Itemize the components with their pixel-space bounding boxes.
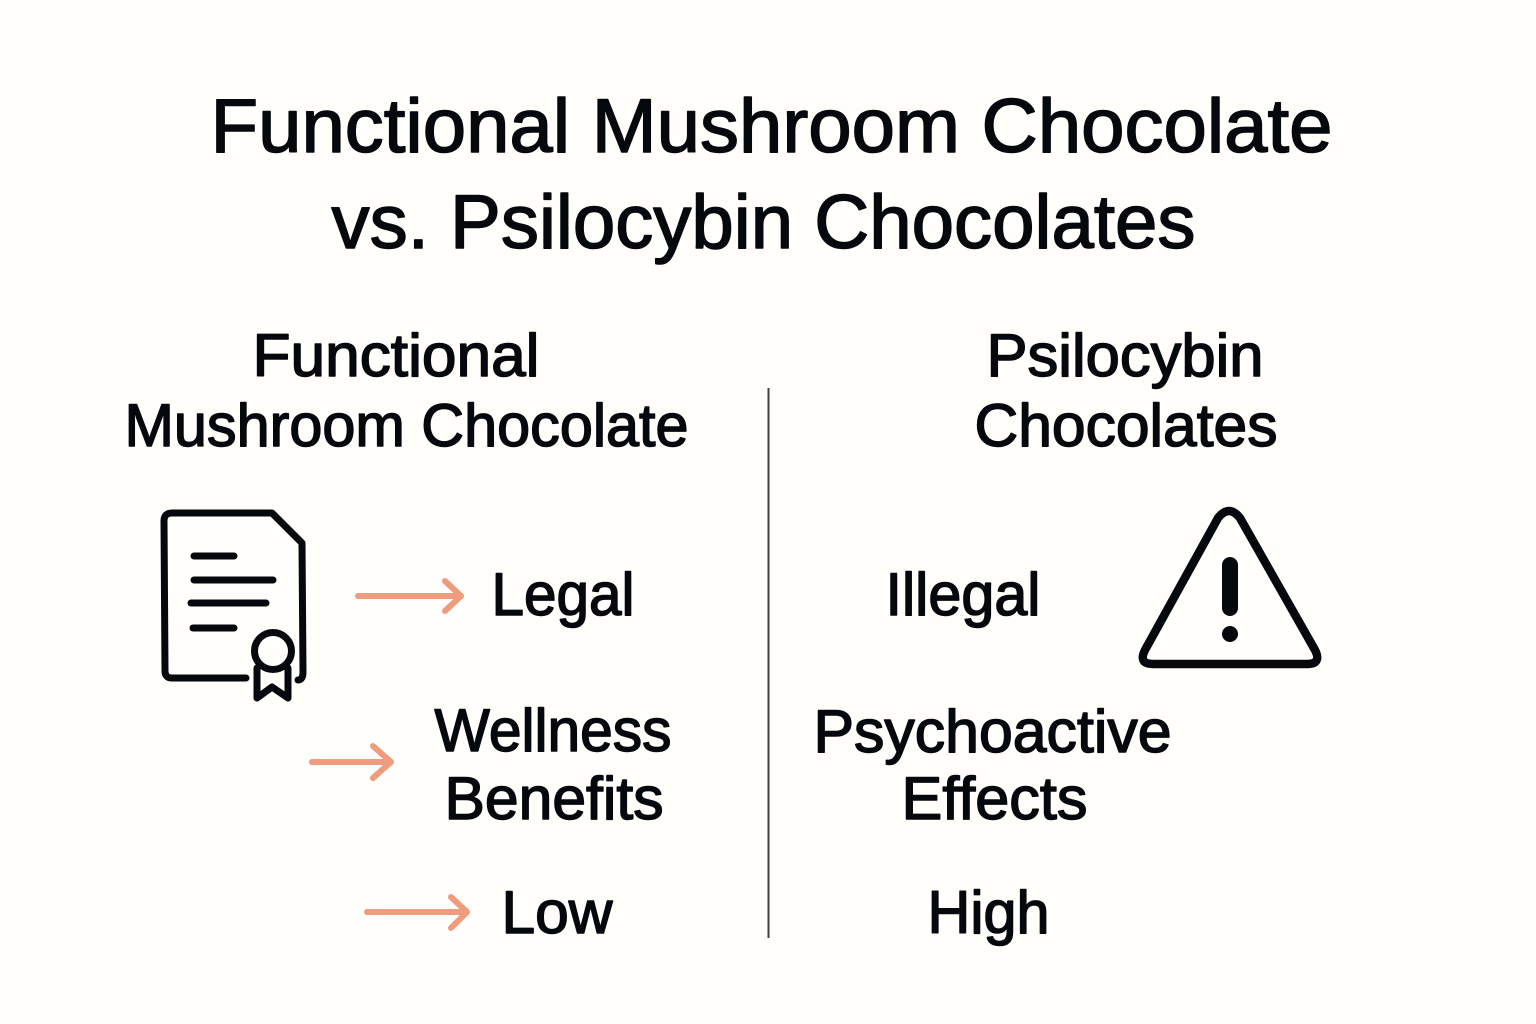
icon: warning triangle bbox=[1143, 511, 1317, 664]
title: Functional Mushroom Chocolate bbox=[210, 84, 1332, 169]
title bbox=[210, 84, 1332, 265]
right column heading bbox=[974, 322, 1278, 459]
center divider bbox=[768, 388, 770, 938]
right column heading: Chocolates bbox=[974, 392, 1278, 459]
arrow: legal bbox=[358, 581, 461, 611]
label: psychoactive effects: Psychoactive bbox=[814, 698, 1172, 765]
label: illegal: Illegal bbox=[886, 561, 1040, 628]
label: psychoactive effects bbox=[814, 698, 1172, 832]
label: wellness benefits bbox=[434, 697, 672, 832]
label: legal: Legal bbox=[492, 561, 634, 628]
label: low: Low bbox=[502, 879, 613, 946]
title: vs. Psilocybin Chocolates bbox=[332, 180, 1196, 265]
right column heading: Psilocybin bbox=[986, 322, 1264, 389]
left column heading bbox=[124, 322, 688, 459]
arrow: low bbox=[367, 897, 467, 928]
label: wellness benefits: Wellness bbox=[434, 697, 672, 764]
label: psychoactive effects: Effects bbox=[902, 765, 1088, 832]
label: wellness benefits: Benefits bbox=[444, 765, 664, 832]
left column heading: Functional bbox=[252, 322, 540, 389]
label: high: High bbox=[928, 879, 1050, 946]
arrow: wellness benefits bbox=[312, 746, 391, 778]
icon: certificate document bbox=[164, 513, 303, 698]
left column heading: Mushroom Chocolate bbox=[124, 392, 688, 459]
